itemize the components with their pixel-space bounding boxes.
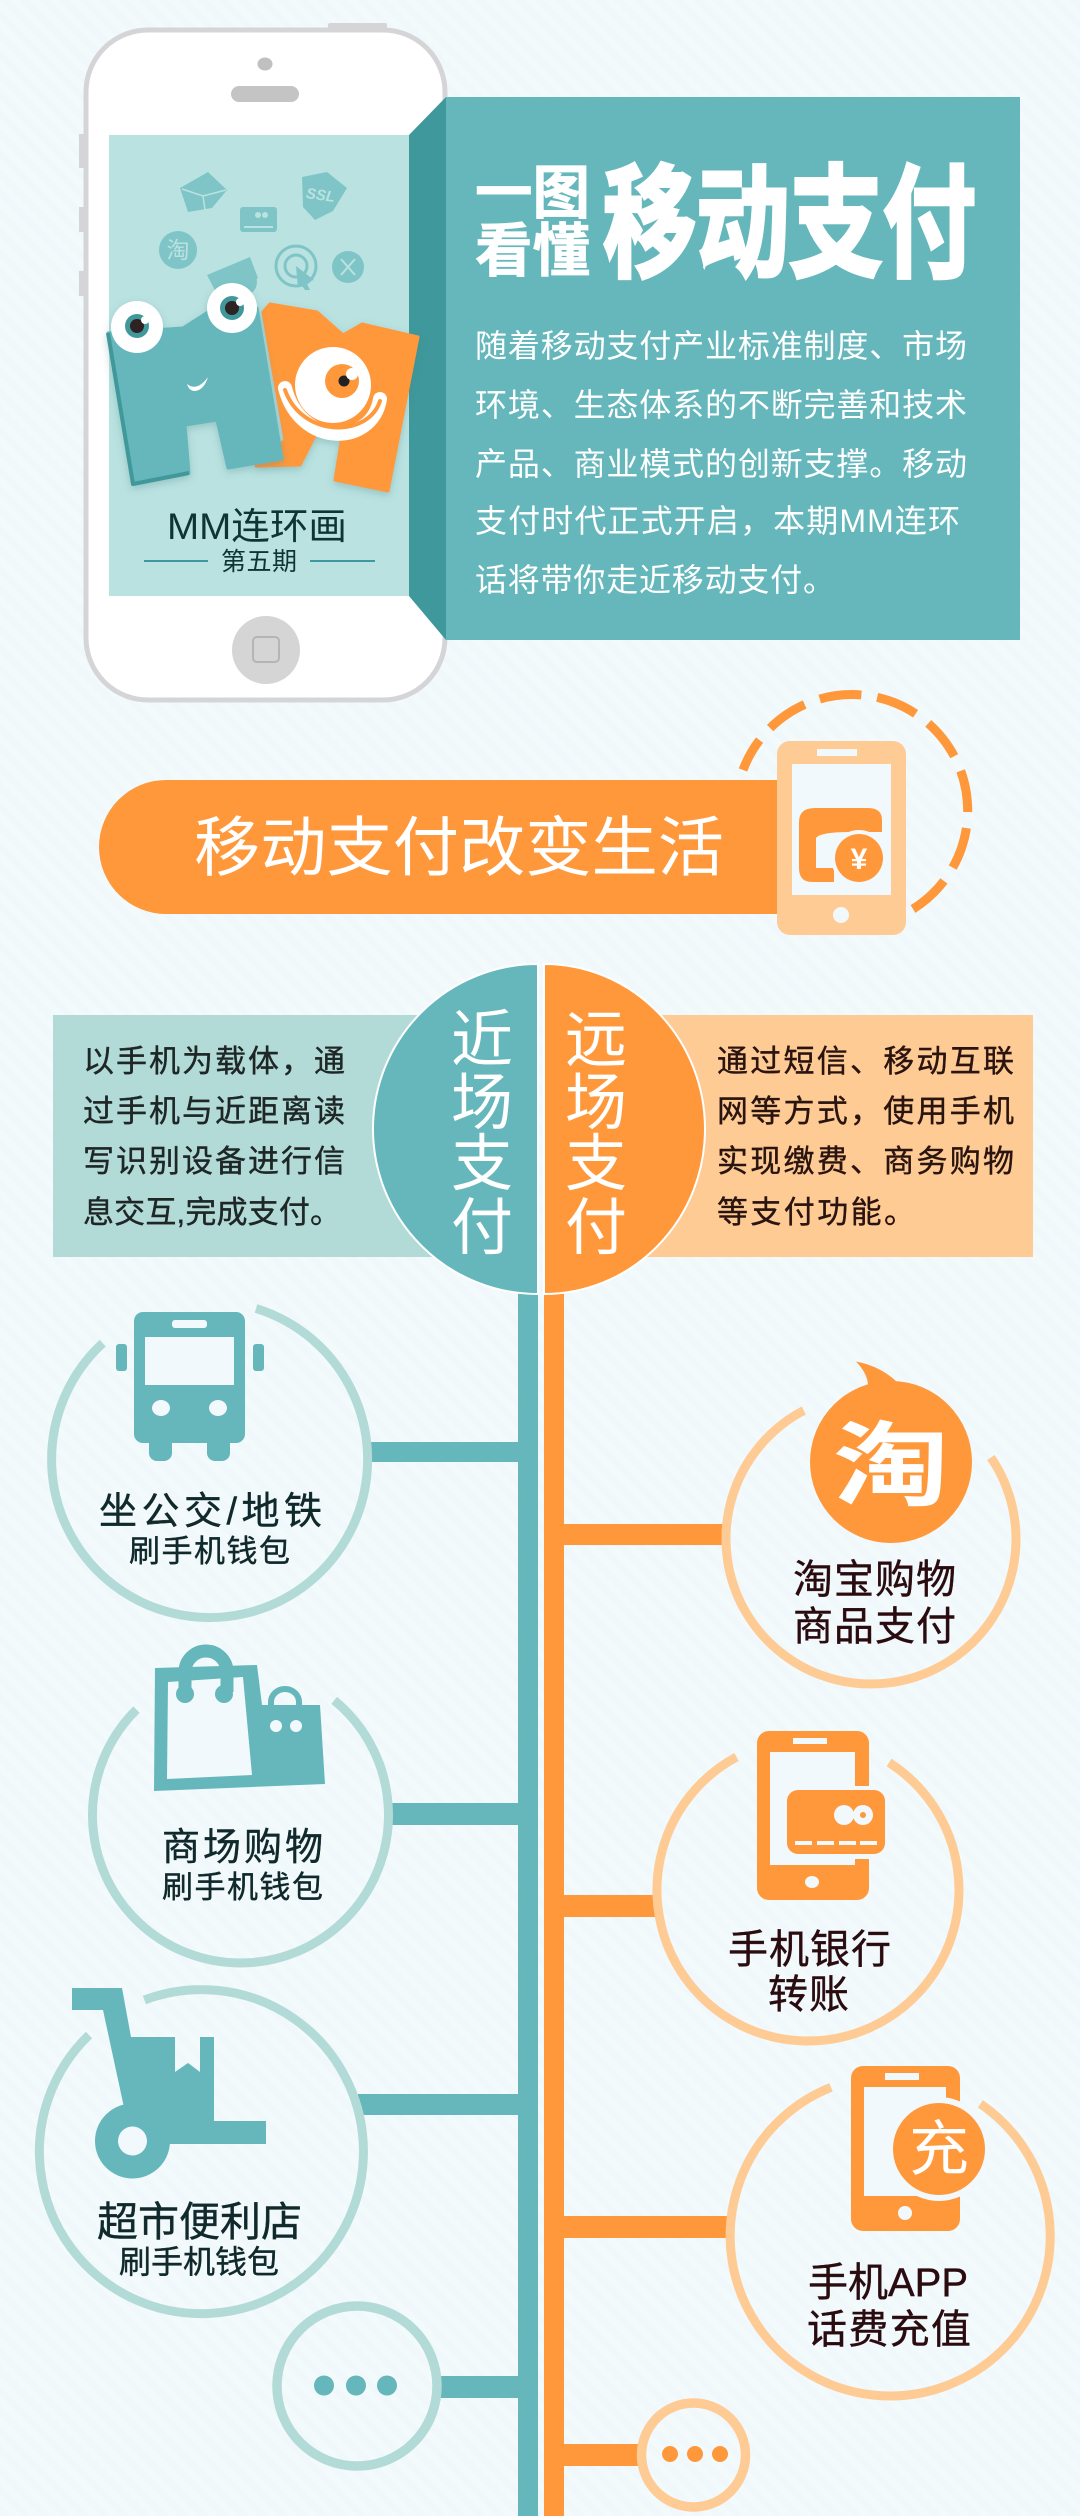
heading: 近场支付 — [373, 964, 538, 1294]
label — [99, 1491, 322, 1569]
label: 转账 — [768, 1973, 849, 2017]
label — [807, 2261, 971, 2352]
label — [793, 1558, 956, 1649]
icon: bus — [116, 1312, 264, 1461]
icon: Taobao bubble: 淘 — [833, 1416, 949, 1518]
screen caption: 第五期: 第五期 — [221, 548, 297, 576]
phone illustration — [79, 23, 445, 700]
heading: 近场支付: 场 — [451, 1069, 513, 1138]
icon: phone with top-up badge — [851, 2066, 991, 2231]
panel: near-field description — [53, 1015, 453, 1257]
label: 商场购物 — [162, 1827, 323, 1869]
label: 坐公交/地铁 — [99, 1491, 322, 1533]
screen caption: MM连环画: MM连环画 — [167, 506, 347, 547]
intro panel — [409, 97, 1020, 640]
label: 刷手机钱包 — [162, 1870, 323, 1905]
panel: near-field description: 以手机为载体，通 — [83, 1044, 345, 1079]
intro text: 话将带你走近移动支付。 — [475, 562, 835, 598]
heading: 近场支付: 支 — [451, 1130, 513, 1199]
icon: phone with wallet: ¥ — [851, 843, 868, 876]
icon: Taobao bubble — [810, 1362, 972, 1543]
icon: phone with wallet — [777, 741, 906, 935]
title: 移动支付: 移动支付 — [603, 157, 976, 293]
item: supermarket — [39, 1988, 518, 2314]
panel: remote description: 通过短信、移动互联 — [717, 1044, 1014, 1079]
item: bus and subway — [52, 1308, 518, 1618]
heading: 近场支付: 近 — [451, 1006, 513, 1075]
intro text: 环境、生态体系的不断完善和技术 — [475, 387, 967, 423]
title: 一图看懂: 看懂 — [475, 219, 590, 284]
label: 话费充值 — [807, 2308, 971, 2352]
panel: near-field description: 写识别设备进行信 — [83, 1144, 345, 1179]
section banner — [99, 695, 968, 935]
label — [728, 1928, 891, 2017]
panel: remote description: 等支付功能。 — [717, 1195, 915, 1230]
icon: hand truck — [72, 1988, 266, 2178]
item: mall shopping — [92, 1651, 518, 1963]
label: 刷手机钱包 — [119, 2244, 279, 2280]
heading: 远场支付: 支 — [565, 1130, 627, 1199]
title: 一图看懂 — [475, 161, 590, 284]
label — [97, 2199, 302, 2280]
faded payment icons — [159, 172, 364, 300]
intro text: 支付时代正式开启，本期MM连环 — [475, 503, 960, 539]
panel: remote description — [620, 1015, 1033, 1257]
intro text — [475, 328, 967, 598]
icon: phone with bank card — [757, 1731, 889, 1900]
orange trunk line — [544, 1280, 564, 2516]
item: more near-field — [277, 2306, 518, 2466]
orange M character — [256, 304, 418, 491]
heading: 近场支付: 付 — [451, 1194, 513, 1263]
label — [162, 1827, 323, 1905]
label: 淘宝购物 — [793, 1558, 956, 1602]
label: 手机银行 — [728, 1928, 891, 1972]
item: mobile banking — [564, 1731, 959, 2041]
heading: 远场支付 — [544, 964, 705, 1294]
panel: near-field description: 过手机与近距离读 — [83, 1094, 345, 1129]
title: 一图看懂: 一图 — [475, 161, 590, 226]
label: 商品支付 — [793, 1605, 956, 1649]
panel: near-field description: 息交互,完成支付。 — [83, 1195, 341, 1230]
intro text: 随着移动支付产业标准制度、市场 — [475, 328, 967, 364]
icon: dashed ring — [743, 695, 968, 909]
item: Taobao — [564, 1362, 1016, 1684]
item: app top-up — [564, 2066, 1050, 2396]
intro text: 产品、商业模式的创新支撑。移动 — [475, 446, 967, 482]
label: 手机APP — [808, 2261, 968, 2305]
label: 超市便利店 — [97, 2199, 302, 2245]
label: 刷手机钱包 — [129, 1534, 290, 1569]
faded payment icons: 淘 — [166, 237, 190, 263]
icon: shopping bags — [154, 1651, 325, 1791]
item: more remote — [564, 2403, 746, 2507]
phone screen — [109, 135, 409, 596]
faded payment icons: SSL — [305, 185, 336, 206]
teal trunk line — [518, 1280, 538, 2516]
heading: 远场支付: 远 — [565, 1006, 627, 1075]
panel: remote description: 实现缴费、商务购物 — [717, 1144, 1014, 1179]
panel: remote description: 网等方式，使用手机 — [717, 1094, 1014, 1129]
icon: phone with top-up badge: 充 — [909, 2116, 969, 2183]
teal M character — [108, 283, 282, 484]
banner heading: 移动支付改变生活 — [194, 811, 724, 884]
heading: 远场支付: 付 — [565, 1194, 627, 1263]
heading: 远场支付: 场 — [565, 1069, 627, 1138]
